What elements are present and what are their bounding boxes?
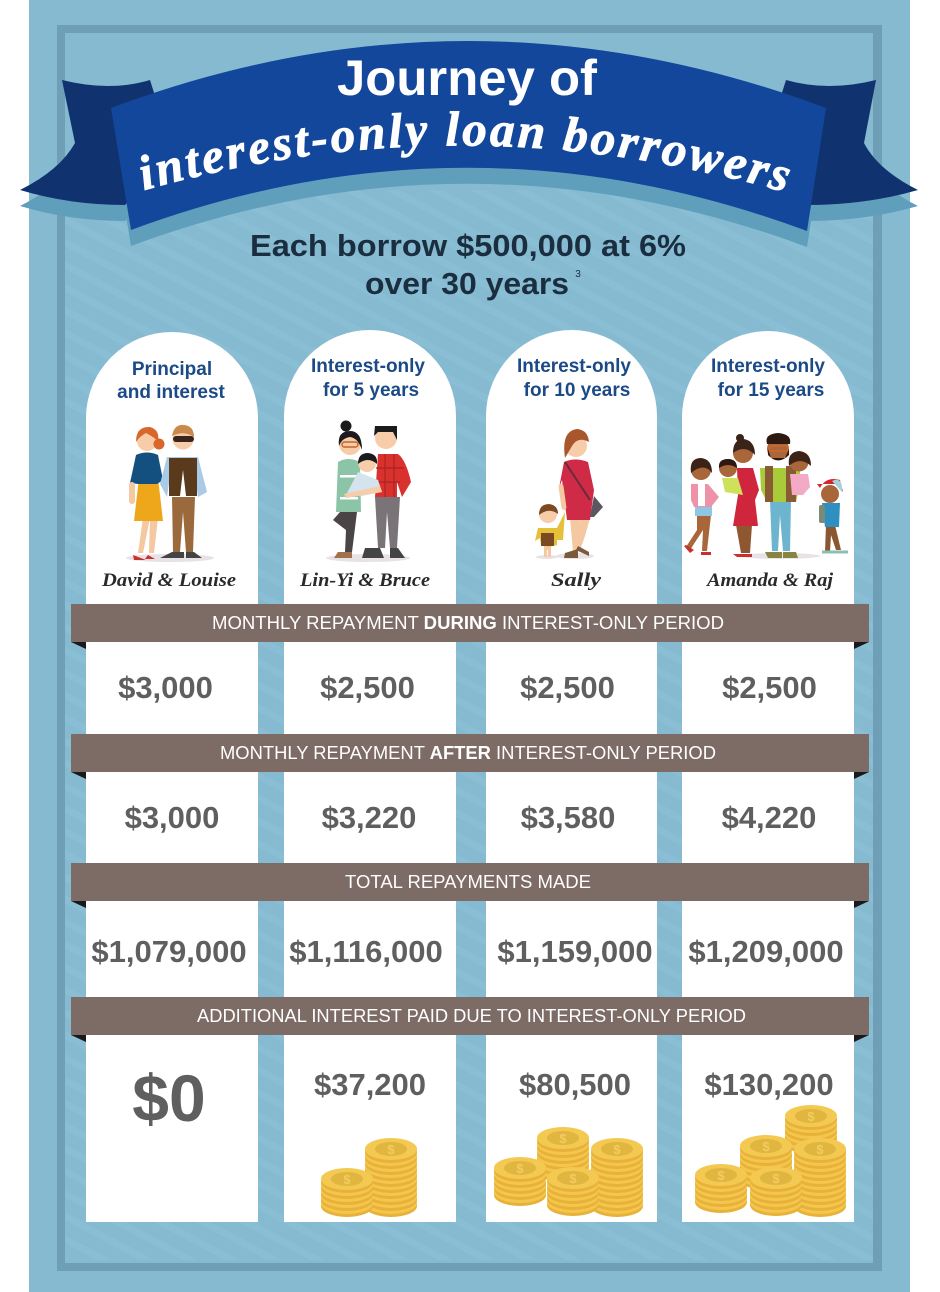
title banner — [20, 41, 918, 247]
column headings: Interest-only — [311, 356, 425, 377]
column headings — [117, 356, 825, 403]
banner body — [111, 41, 826, 231]
band: additional interest: ADDITIONAL INTEREST PAID DUE TO INTEREST-ONLY PERIOD — [197, 1006, 746, 1026]
column: 10 years — [486, 330, 657, 1222]
column: 5 years — [284, 330, 456, 1222]
values row two: $3,220 — [322, 800, 416, 835]
values row one: $2,500 — [320, 670, 415, 705]
illustration: Lin-Yi and Bruce — [326, 420, 411, 562]
coins: 15 years — [695, 1105, 846, 1217]
band: during interest-only: MONTHLY REPAYMENT DURING INTEREST-ONLY PERIOD — [212, 613, 724, 633]
band: after interest-only — [71, 734, 869, 779]
borrower names: Sally — [551, 570, 602, 591]
borrower names: Amanda & Raj — [706, 570, 834, 591]
title line two: interest-only loan borrowers — [140, 111, 790, 190]
values row four: $80,500 — [519, 1067, 631, 1102]
values row one — [118, 670, 817, 705]
values row one: $2,500 — [722, 670, 817, 705]
column headings: for 10 years — [524, 380, 630, 401]
column: 15 years — [682, 331, 854, 1222]
illustration: David and Louise — [126, 425, 214, 562]
ribbon tail left — [20, 80, 172, 205]
coins: 5 years — [321, 1138, 417, 1217]
coins: 10 years: $ — [559, 1131, 567, 1146]
subtitle: over 30 years — [365, 266, 569, 301]
values row four: $130,200 — [704, 1067, 834, 1102]
banner shadow — [20, 57, 918, 247]
illustration: Sally — [535, 429, 603, 559]
coins: 15 years: $ — [717, 1168, 725, 1183]
values row four — [132, 1061, 834, 1135]
column headings: for 15 years — [718, 380, 824, 401]
borrower names — [101, 570, 834, 591]
column headings: Principal — [132, 359, 212, 380]
borrower names: David & Louise — [101, 570, 237, 591]
values row one: $2,500 — [520, 670, 615, 705]
coins: 15 years: $ — [762, 1139, 770, 1154]
values row two — [125, 800, 816, 835]
band: during interest-only — [71, 604, 869, 649]
subtitle: Each borrow $500,000 at 6% — [250, 228, 686, 263]
coins: 10 years: $ — [613, 1142, 621, 1157]
values row one: $3,000 — [118, 670, 213, 705]
column: principal and interest — [86, 332, 258, 1222]
values row three: $1,159,000 — [497, 934, 653, 969]
values row two: $4,220 — [722, 800, 816, 835]
values row two: $3,000 — [125, 800, 219, 835]
band: total repayments — [71, 863, 869, 908]
subtitle: 3 — [575, 269, 581, 280]
values row two: $3,580 — [521, 800, 615, 835]
coins: 15 years: $ — [772, 1171, 780, 1186]
values row four: $0 — [132, 1061, 206, 1135]
coins: 15 years: $ — [807, 1109, 815, 1124]
band: additional interest — [71, 997, 869, 1042]
subtitle — [250, 228, 686, 301]
band: after interest-only: MONTHLY REPAYMENT AFTER INTEREST-ONLY PERIOD — [220, 743, 716, 763]
values row three: $1,209,000 — [688, 934, 844, 969]
coins: 10 years — [494, 1127, 643, 1217]
column headings: for 5 years — [323, 380, 419, 401]
coins: 10 years: $ — [516, 1161, 524, 1176]
title line one: Journey of — [337, 50, 597, 106]
illustration: Amanda and Raj — [684, 433, 848, 559]
values row three: $1,079,000 — [91, 934, 247, 969]
values row four: $37,200 — [314, 1067, 426, 1102]
borrower names: Lin-Yi & Bruce — [299, 570, 431, 591]
values row three — [91, 934, 844, 969]
band: total repayments: TOTAL REPAYMENTS MADE — [345, 872, 591, 892]
coins: 5 years: $ — [343, 1172, 351, 1187]
column headings: Interest-only — [517, 356, 631, 377]
column headings: Interest-only — [711, 356, 825, 377]
column headings: and interest — [117, 382, 226, 403]
coins: 5 years: $ — [387, 1142, 395, 1157]
coins: 15 years: $ — [816, 1142, 824, 1157]
ribbon tail right — [764, 80, 918, 205]
coins: 10 years: $ — [569, 1171, 577, 1186]
values row three: $1,116,000 — [289, 934, 443, 969]
